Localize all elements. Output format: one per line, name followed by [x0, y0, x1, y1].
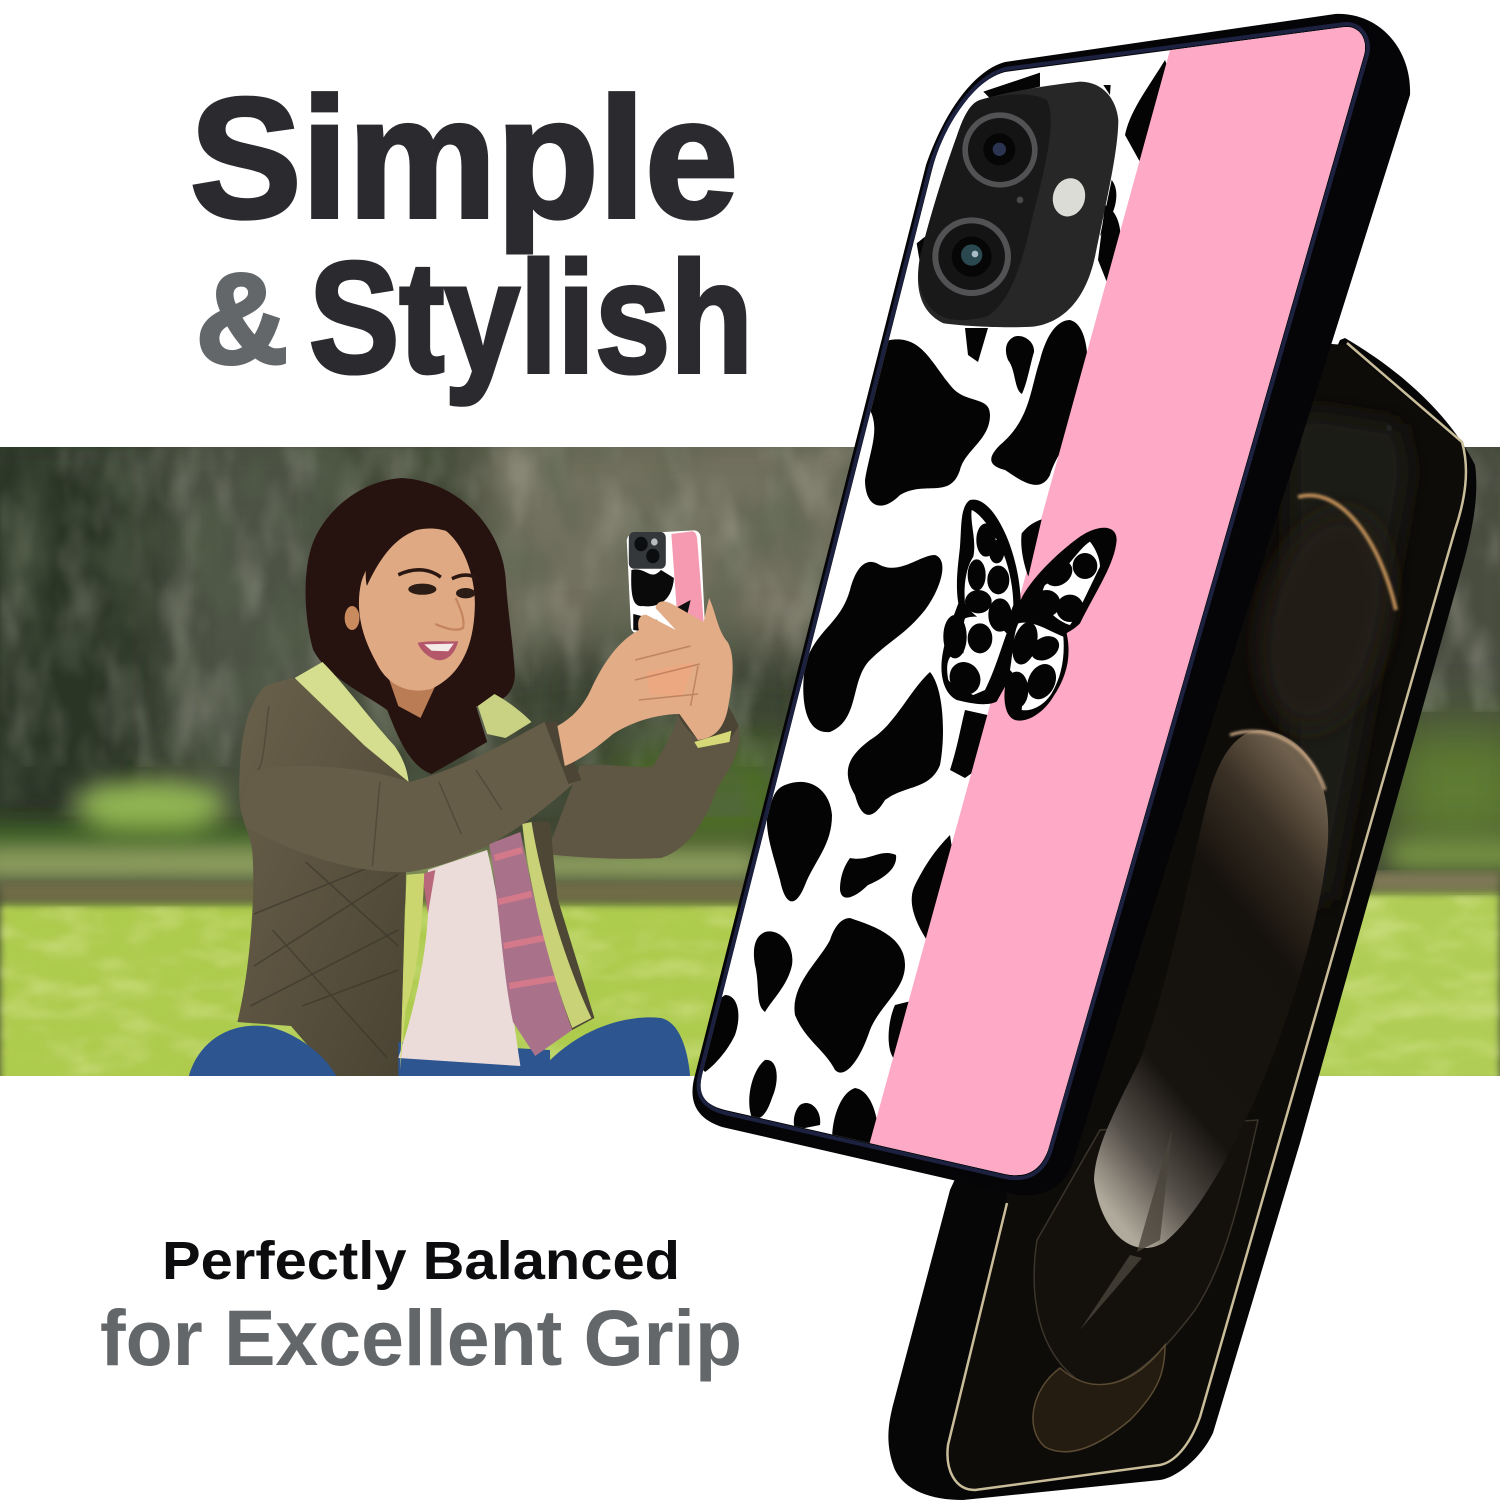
caption line two: for Excellent Grip	[100, 1293, 742, 1382]
mini butterfly	[676, 600, 691, 616]
lower lens	[932, 217, 1011, 296]
mini phone	[626, 530, 705, 634]
jacket body	[237, 678, 409, 1082]
face	[359, 526, 475, 691]
front sleeve	[295, 722, 574, 872]
pink panel	[865, 20, 1380, 1190]
hair over face	[366, 526, 446, 586]
caption: Perfectly Balanced for Excellent Grip	[100, 1231, 742, 1382]
phone body	[888, 338, 1476, 1500]
photo band: park background	[0, 420, 1500, 1084]
ear	[345, 606, 359, 630]
butterfly	[941, 500, 1117, 721]
hair	[306, 478, 515, 774]
camera module	[917, 73, 1118, 327]
rainbow arc middle	[1230, 731, 1325, 790]
jeans middle	[398, 1042, 550, 1076]
microphone dot	[1017, 197, 1023, 203]
case back panel	[690, 20, 1390, 1190]
caption line one: Perfectly Balanced	[162, 1231, 680, 1291]
butterfly body silhouette	[941, 500, 1117, 721]
word: Stylish: Stylish	[309, 230, 753, 406]
wallpaper rays	[1080, 1130, 1172, 1330]
ampersand: &	[196, 248, 288, 391]
grass texture	[0, 906, 760, 1076]
flash	[1049, 175, 1089, 220]
plaid overshirt	[489, 832, 572, 1056]
mini camera	[629, 532, 666, 569]
back sleeve	[546, 714, 739, 859]
gold frame line	[947, 343, 1466, 1490]
neck	[389, 680, 435, 718]
camera body	[918, 82, 1118, 327]
back phone with gold frame	[888, 338, 1480, 1500]
collar right	[478, 694, 532, 738]
upper lens	[962, 112, 1038, 188]
top notch	[1386, 425, 1392, 431]
butterfly spots	[945, 525, 1096, 707]
mini pink panel	[671, 531, 704, 626]
smile	[418, 641, 458, 660]
back sleeve cuff	[678, 706, 738, 740]
headline: Simple & Stylish	[190, 63, 753, 406]
mini spots	[631, 569, 674, 632]
lit phone reflection	[646, 662, 694, 696]
finger lines	[635, 646, 700, 706]
eyes	[408, 584, 436, 595]
phone screen and wallpaper	[1032, 344, 1420, 1452]
front phone with cow print case	[690, 14, 1410, 1195]
foliage texture	[0, 447, 860, 767]
word: Simple: Simple	[190, 63, 738, 254]
yellow wrist band	[694, 731, 731, 748]
lower ellipse	[1033, 1345, 1165, 1452]
case navy rim	[699, 24, 1368, 1178]
case outer body	[692, 14, 1410, 1195]
collar left	[295, 662, 409, 782]
mini case	[626, 530, 705, 634]
wallpaper arc	[1094, 730, 1328, 1248]
camera shadow spots	[917, 73, 1116, 263]
yellow zipper strip right	[522, 822, 591, 1028]
wallpaper ellipse outlines	[1034, 1120, 1258, 1385]
jacket right panel	[522, 822, 594, 1030]
hands	[557, 598, 733, 766]
yellow zipper strip left	[400, 873, 424, 1070]
eyebrows	[398, 570, 476, 579]
front sleeve cuff	[544, 722, 581, 784]
jeans	[187, 1017, 691, 1082]
shirt	[398, 850, 520, 1066]
rainbow arc top	[1298, 495, 1396, 610]
jacket quilting	[250, 862, 398, 1058]
camera inner recess	[919, 94, 1051, 320]
woman taking a selfie	[187, 478, 739, 1082]
cow print spots	[695, 60, 1180, 1145]
butterfly antennae lobe	[1021, 519, 1042, 577]
nose shadow	[435, 598, 464, 630]
butterfly wing patterns	[947, 510, 1100, 710]
